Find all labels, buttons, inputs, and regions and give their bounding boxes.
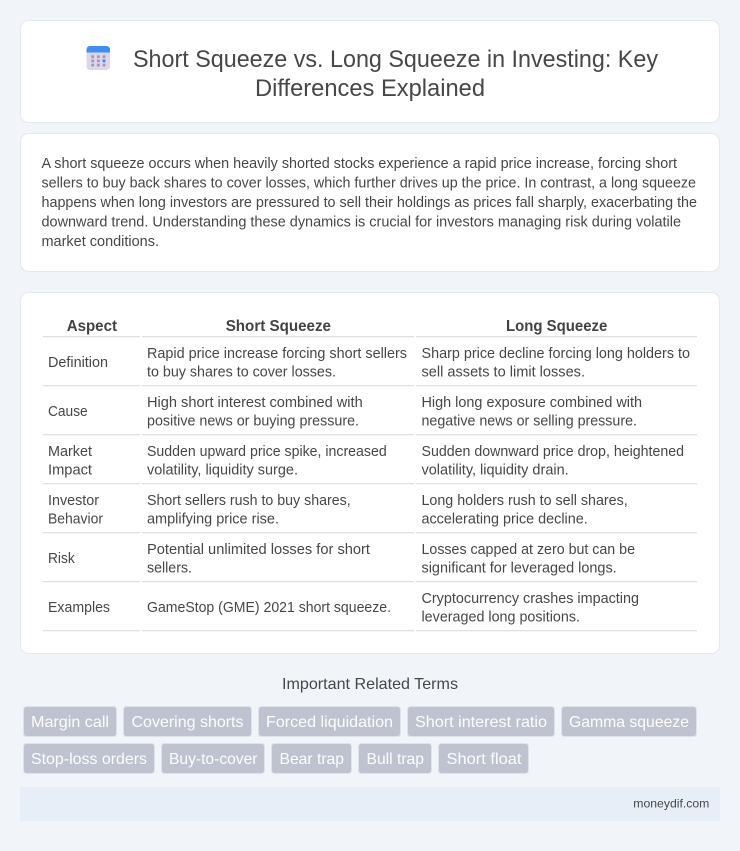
table row: investor behavior: accelerating price decline. <box>422 512 588 528</box>
text block: introduction paragraph: downward trend. Understanding these dynamics is crucial for investors managing risk during volatile <box>42 214 681 230</box>
table header row: Short Squeeze <box>226 318 331 335</box>
table row: market impact: Impact <box>48 462 92 478</box>
table row: investor behavior <box>48 493 628 528</box>
tag: buy-to-cover: Buy-to-cover <box>169 751 258 768</box>
title <box>133 46 658 102</box>
table row: cause <box>48 395 642 430</box>
table row: definition <box>48 346 690 380</box>
tag: stop-loss orders: Stop-loss orders <box>31 751 147 768</box>
tag: gamma squeeze: Gamma squeeze <box>569 714 689 731</box>
tag: buy-to-cover <box>162 744 264 774</box>
table row: risk: Potential unlimited losses for short <box>147 542 370 558</box>
text block: introduction paragraph <box>42 156 697 250</box>
table row: examples <box>48 591 639 626</box>
table header row <box>67 318 607 335</box>
table header row: Long Squeeze <box>506 318 607 335</box>
table row: market impact: Sudden downward price drop, heightened <box>422 444 684 460</box>
table row: definition: Definition <box>48 355 108 371</box>
title: Short Squeeze vs. Long Squeeze in Investing: Key <box>133 46 658 73</box>
table row: definition: Sharp price decline forcing long holders to <box>422 346 690 362</box>
table row: investor behavior: Long holders rush to sell shares, <box>422 493 628 509</box>
text block: introduction paragraph: sellers to buy back shares to cover losses, which further drives up the price. In contrast, a long squeeze <box>42 176 696 192</box>
text block: introduction paragraph: A short squeeze occurs when heavily shorted stocks experience a rapid price increase, forcing short <box>42 156 677 172</box>
tag: margin call: Margin call <box>31 714 109 731</box>
table header row: Aspect <box>67 318 118 335</box>
table row: market impact <box>48 444 684 478</box>
text block: introduction paragraph: market conditions. <box>42 234 159 250</box>
table row: investor behavior: Behavior <box>48 512 103 528</box>
table row: risk: sellers. <box>147 560 192 576</box>
table row: market impact: Market <box>48 444 92 460</box>
title: Differences Explained <box>255 75 485 102</box>
tag: forced liquidation <box>258 706 400 736</box>
text block: introduction paragraph: happens when long investors are pressured to sell their holdings as prices fall sharply, exacerbating the <box>42 195 697 211</box>
table row: market impact: volatility, liquidity surge. <box>147 462 298 478</box>
table row: risk <box>48 542 635 576</box>
tag: short interest ratio <box>408 706 554 736</box>
table row: cause: High long exposure combined with <box>422 395 642 411</box>
tag: bull trap: Bull trap <box>366 751 424 768</box>
table row: examples: Examples <box>48 600 110 616</box>
tag: margin call <box>24 706 116 736</box>
tag: short float <box>438 744 528 774</box>
table row: definition: Rapid price increase forcing short sellers <box>147 346 407 362</box>
table row: market impact: volatility, liquidity drain. <box>422 462 569 478</box>
table row: examples: Cryptocurrency crashes impacting <box>422 591 639 607</box>
table row: examples: GameStop (GME) 2021 short squeeze. <box>147 600 391 616</box>
footer bar <box>20 787 720 821</box>
table row: definition: sell assets to limit losses. <box>422 364 585 380</box>
panel: related term tags <box>24 706 696 774</box>
table row: investor behavior: Short sellers rush to buy shares, <box>147 493 351 509</box>
table row: investor behavior: amplifying price rise. <box>147 512 279 528</box>
icon: calendar <box>86 46 110 70</box>
table row: cause: High short interest combined with <box>147 395 363 411</box>
table row: cause: positive news or buying pressure. <box>147 414 359 430</box>
table row: market impact: Sudden upward price spike, increased <box>147 444 387 460</box>
tag: bear trap: Bear trap <box>280 751 344 768</box>
table row: risk: Losses capped at zero but can be <box>422 542 635 558</box>
tag: bear trap <box>272 744 352 774</box>
tag: bull trap <box>358 744 432 774</box>
tag: covering shorts: Covering shorts <box>132 714 244 731</box>
tag: stop-loss orders <box>24 744 154 774</box>
table row: examples: leveraged long positions. <box>422 610 580 626</box>
panel: title header <box>20 20 720 122</box>
heading: important related terms: Important Related Terms <box>282 676 458 693</box>
table row: risk: Risk <box>48 551 75 567</box>
panel: introduction <box>20 134 720 272</box>
tag: forced liquidation: Forced liquidation <box>266 714 393 731</box>
table row: risk: significant for leveraged longs. <box>422 560 617 576</box>
tag: gamma squeeze <box>562 706 696 736</box>
table row: investor behavior: Investor <box>48 493 99 509</box>
panel: comparison table <box>20 292 720 654</box>
table row: definition: to buy shares to cover losses. <box>147 364 336 380</box>
table row: cause: negative news or selling pressure. <box>422 414 637 430</box>
footer source text: moneydif.com <box>633 797 709 811</box>
tag: short interest ratio: Short interest ratio <box>415 714 547 731</box>
tag: covering shorts <box>124 706 252 736</box>
table row: cause: Cause <box>48 404 88 420</box>
tag: short float: Short float <box>446 751 522 768</box>
